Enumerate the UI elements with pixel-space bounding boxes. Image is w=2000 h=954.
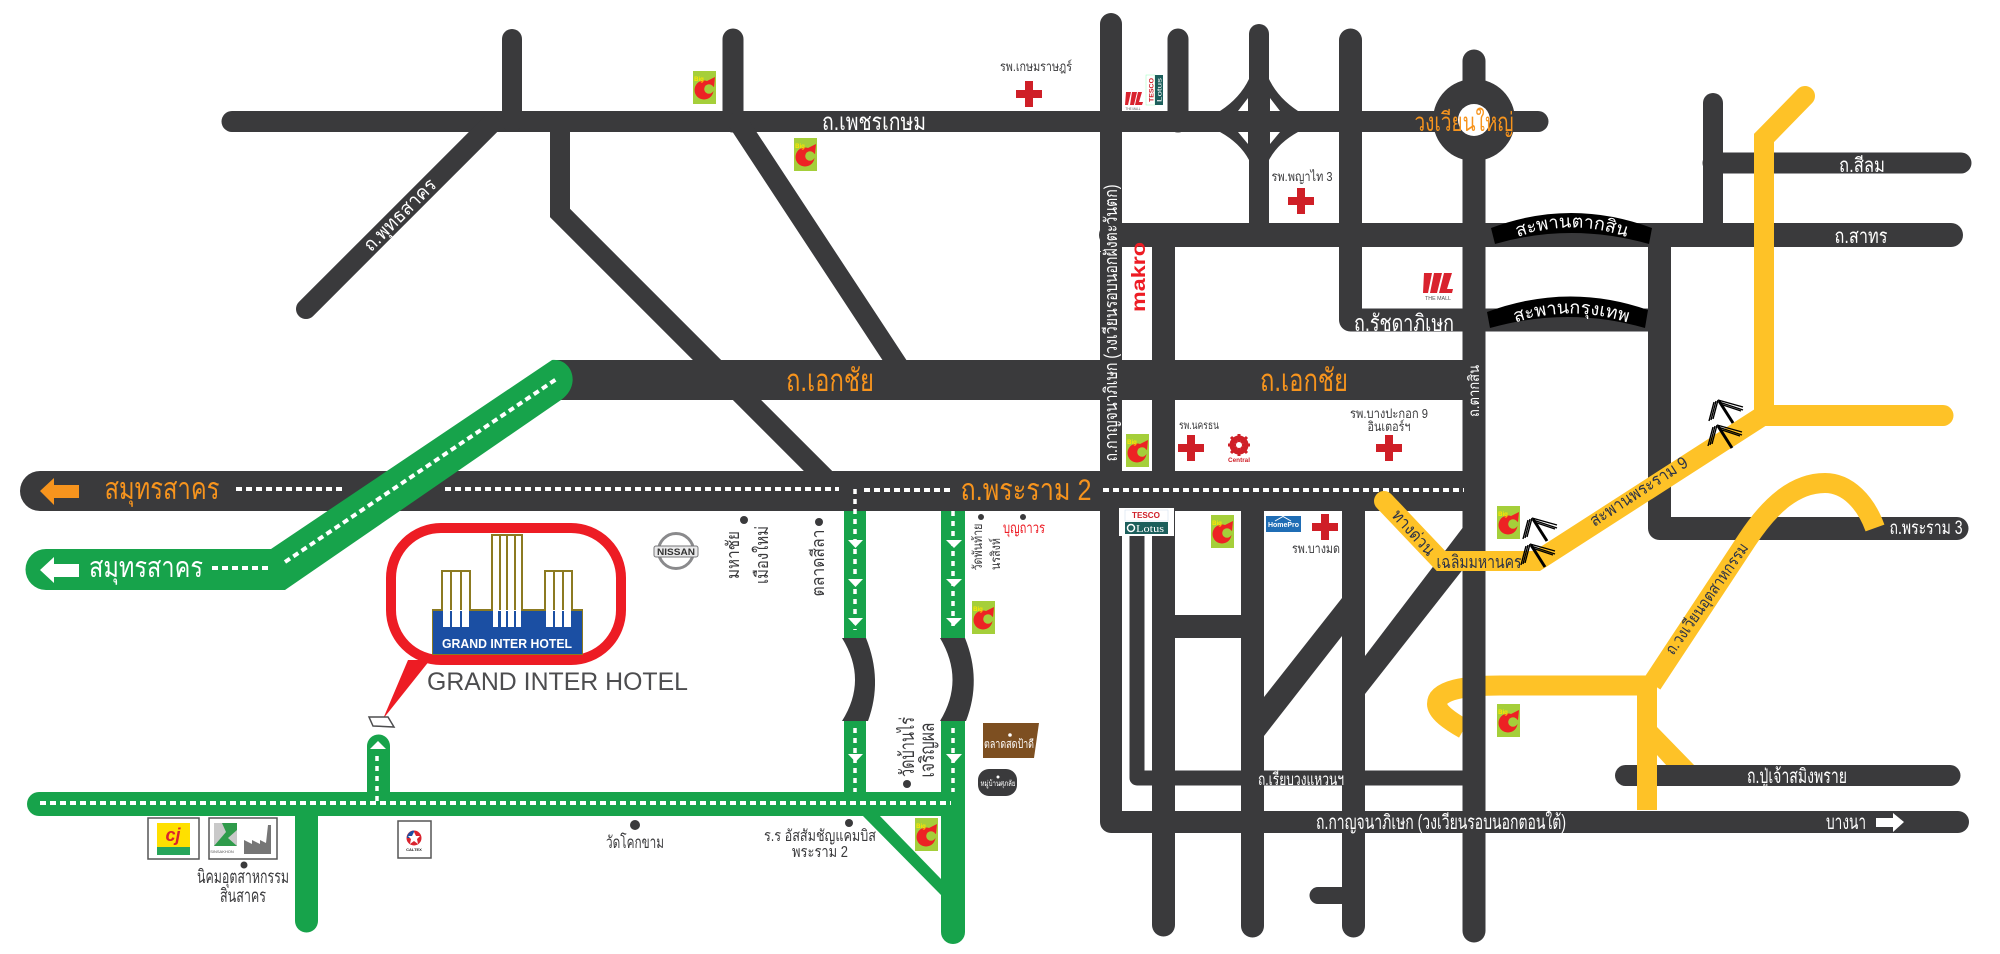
icon: Big C stores: Big [1212,521,1222,527]
place labels west: มหาชัย [723,531,743,579]
road labels: ถ.ปู่เจ้าสมิงพราย [1747,766,1847,789]
place labels west: สินสาคร [220,886,266,907]
icon: Central logo [1228,434,1250,464]
road labels: ถ.เอกชัย [1260,363,1348,398]
hospital: Phyathai 3: รพ.พญาไท 3 [1272,169,1332,184]
direction arrowheads on green roads [370,540,962,763]
curved guide for Krung Thep bridge text [1514,314,1629,323]
road labels [89,107,1962,841]
hospital: Bangmod [1292,514,1340,556]
place labels west: วัดพันท้าย [970,524,985,570]
icon: Tesco Lotus sign: Lotus [1136,523,1164,535]
icon: CJ Supermarket: cj [165,825,182,845]
curved guide for Taksin bridge text [1518,228,1626,237]
icon: Nissan logo: NISSAN [657,547,695,557]
icon: The Mall logo small [1125,92,1143,111]
dark bridge arcs over green roads [842,638,974,721]
hotel logo: GRAND INTER HOTEL [442,636,572,651]
white arrow: to Bang Na [1876,813,1904,832]
yellow branch under Phu Chao road [1657,727,1695,766]
road labels: ถ.ตากสิน [1466,365,1483,417]
road labels: ถ.พระราม 2 [960,474,1092,507]
icon: CJ Supermarket [148,818,199,859]
dashed centre lines [40,378,1464,803]
green route network [27,511,965,944]
icon: Big C stores: Big [694,77,704,83]
hospital: Bangpakok 9: อินเตอร์ฯ [1367,419,1410,434]
road labels: สมุทรสาคร [104,473,220,508]
icon: Big C stores [693,71,1520,851]
market label box [983,723,1039,758]
village label box [978,769,1017,796]
road labels: ถ.เรียบวงแหวนฯ [1258,770,1344,789]
road labels: ถ.สีลม [1839,155,1885,177]
place labels west: ตลาดสีลา [808,530,828,596]
icon: HomePro [1266,516,1301,532]
icon: Big C stores: Big [1498,710,1508,716]
road labels: ถ.กาญจนาภิเษก (วงเวียนรอบนอกฝั่งตะวันตก) [1098,184,1121,462]
place labels west: นิคมอุตสาหกรรม [197,867,289,889]
road labels: สมุทรสาคร [89,552,203,585]
place labels west: พระราม 2 [792,844,848,861]
road labels: บางนา [1826,812,1866,834]
hospital: Kasemrad: รพ.เกษมราษฎร์ [1000,59,1072,74]
place labels west: เมืองใหม่ [751,526,772,584]
hospital markers [1000,59,1428,556]
hospital: Bangpakok 9: รพ.บางปะกอก 9 [1350,406,1428,421]
road labels: ทางด่วน [1388,506,1439,560]
icon: Tesco Lotus small rotated [1146,75,1164,105]
icon: Big C stores: Big [973,607,983,613]
hotel name: GRAND INTER HOTEL [427,668,688,696]
icon: Caltex: CALTEX [406,847,422,852]
hotel logo [433,535,582,654]
white arrow: to Samut Sakhon [40,557,79,583]
orange arrow: to Samut Sakhon [40,478,79,505]
icon: HomePro: HomePro [1268,522,1299,529]
icon: The Mall logo large: THE MALL [1425,296,1451,302]
place labels west: วัดโคกขาม [606,832,664,852]
icon: Tesco Lotus sign: TESCO [1132,511,1160,520]
black bridges [1487,213,1652,328]
icon: Caltex [398,821,431,858]
road labels: ถ.กาญจนาภิเษก (วงเวียนรอบนอกตอนใต้) [1316,811,1566,834]
icon: Sinsakhon industrial estate [209,818,277,859]
icon: Sinsakhon industrial estate: SINSAKHON [210,849,234,854]
icon: Nissan logo [654,534,698,568]
road: Phu Chao Saming Phrai [1626,765,1950,786]
hotel callout [383,528,621,719]
hospital: Nakornthon [1178,420,1219,461]
icon: Big C stores: Big [795,144,805,150]
place labels west [197,514,1026,907]
hospital: Kasemrad [1000,59,1072,107]
icon: Big C stores: Big [1127,440,1137,446]
icon: makro logo: makro [1129,242,1150,312]
place labels west: วัดบ้านไร่ [896,717,919,777]
callout bubble [391,528,621,660]
yellow expressways [1384,96,1943,810]
place labels west: ร.ร อัสสัมชัญแคมบิส [764,828,876,845]
green route from Ekkachai to Samut Sakhon [26,360,573,590]
hospital: Nakornthon: รพ.นครธน [1179,420,1219,432]
road labels: สะพานกรุงเทพ [1514,303,1630,322]
callout tail [383,660,430,719]
road labels: ถ.วงเวียนอุตสาหกรรม [1662,540,1753,659]
hospital: Phyathai 3 [1272,169,1332,214]
hospital: Bangpakok 9 [1350,406,1428,461]
icon: Tesco Lotus sign [1119,508,1174,536]
road labels: ถ.รัชดาภิเษก [1354,310,1454,336]
place labels west: เจริญผล [917,722,939,778]
place labels west: นรสิงห์ [988,538,1003,570]
icon: Central logo: Central [1228,458,1250,464]
hospital: Bangmod: รพ.บางมด [1292,541,1340,556]
road labels: ถ.พุทธสาคร [360,175,442,257]
road labels: ถ.สาทร [1834,226,1888,248]
market label box: ตลาดสดป้าดี [984,737,1034,751]
road labels: ถ.เพชรเกษม [822,109,926,136]
yellow loop road beneath Taksin road [1437,686,1655,729]
village label box: หมู่บ้านศุภลัย [980,779,1016,789]
icon: Big C stores: Big [916,824,926,830]
icon: Big C stores: Big [1498,512,1508,518]
icon: The Mall logo small: THE MALL [1126,106,1141,111]
icon: Tesco Lotus small rotated: Lotus [1158,78,1164,102]
label: Boonthavorn: บุญถาวร [1003,520,1045,538]
road labels: ถ.เอกชัย [786,363,874,398]
expressway arrows [1521,400,1743,567]
road labels: ถ.พระราม 3 [1890,518,1962,539]
road labels: เฉลิมมหานคร [1436,552,1522,572]
hotel location marker [369,717,394,727]
road labels: สะพานตากสิน [1516,217,1628,236]
icon: Tesco Lotus small rotated: TESCO [1150,78,1156,102]
road labels: สะพานพระราม 9 [1586,453,1691,530]
icon: The Mall logo large [1423,273,1453,302]
road labels: วงเวียนใหญ่ [1414,107,1514,137]
